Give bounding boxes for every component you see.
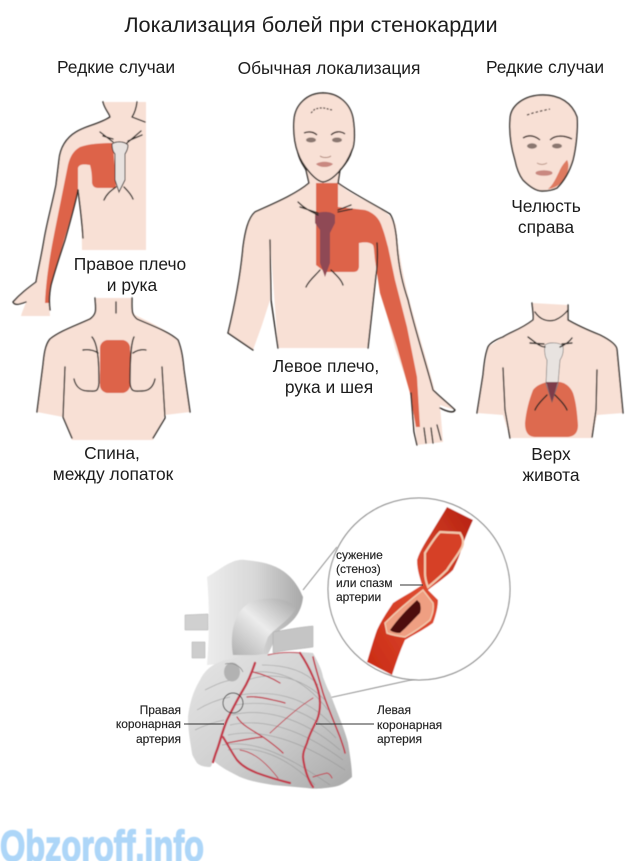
- figure: right shoulder and arm: [13, 102, 146, 316]
- label: left shoulder, arm and neck: [273, 356, 379, 397]
- label: back: Спина,: [84, 443, 140, 463]
- label: right shoulder and arm: и рука: [107, 275, 158, 295]
- sternum: [545, 343, 563, 402]
- label: back: между лопаток: [53, 464, 174, 484]
- label: upper abdomen: живота: [522, 465, 580, 485]
- label: left shoulder, arm and neck: Левое плечо,: [273, 356, 379, 376]
- label: right coronary artery: коронарная: [116, 717, 181, 731]
- label: upper abdomen: Верх: [531, 444, 571, 464]
- lower cut section: [385, 590, 433, 637]
- label: stenosis: сужение: [336, 548, 383, 562]
- label: right coronary artery: [116, 703, 224, 746]
- pain area: shoulder and arm: [45, 143, 116, 303]
- heading: usual localization: Обычная локализация: [238, 58, 420, 78]
- label: stenosis: (стеноз): [336, 562, 381, 576]
- label: left coronary artery: коронарная: [377, 718, 442, 732]
- label: stenosis: [336, 548, 423, 604]
- heart body: [188, 652, 352, 789]
- face: left figure: [304, 108, 345, 167]
- pain area: left shoulder, arm, neck: [316, 183, 420, 427]
- label: right coronary artery: Правая: [140, 703, 181, 717]
- label: upper abdomen: [522, 444, 580, 485]
- pain area: between shoulder blades: [100, 340, 130, 393]
- label: right jaw: справа: [518, 217, 574, 237]
- label: stenosis: или спазм: [336, 576, 393, 590]
- magnified circle: narrowed artery: [328, 498, 510, 680]
- label: right shoulder and arm: Правое плечо: [74, 254, 186, 274]
- face: right figure: [523, 109, 572, 176]
- pain area: upper abdomen: [525, 382, 578, 437]
- diagram: heart: [185, 547, 420, 789]
- label: left shoulder, arm and neck: рука и шея: [285, 377, 373, 397]
- coronary arteries: [213, 652, 345, 787]
- pointer lines to magnified circle: [240, 547, 420, 713]
- label: right jaw: [511, 196, 581, 237]
- label: left coronary artery: [316, 703, 442, 746]
- aorta and great vessels: [207, 560, 303, 665]
- upper cut section: [425, 532, 463, 587]
- pain area: jaw: [548, 160, 568, 189]
- label: right jaw: Челюсть: [511, 196, 581, 216]
- figure: upper abdomen: [477, 303, 623, 438]
- heading: rare cases left: Редкие случаи: [57, 57, 175, 77]
- sternum dark: [315, 212, 335, 277]
- label: right coronary artery: артерия: [136, 732, 181, 746]
- label: back: [53, 443, 174, 484]
- figure: left shoulder, arm and neck: [228, 93, 455, 445]
- heading: rare cases right: Редкие случаи: [486, 57, 604, 77]
- label: stenosis: артерии: [336, 590, 381, 604]
- label: left coronary artery: Левая: [377, 703, 411, 717]
- label: right shoulder and arm: [74, 254, 186, 295]
- label: left coronary artery: артерия: [377, 732, 422, 746]
- sternum: [112, 142, 128, 192]
- lumen: [390, 600, 421, 633]
- figure: right jaw: [510, 95, 577, 191]
- figure: back between shoulder blades: [37, 298, 190, 440]
- title: Локализация болей при стенокардии: [124, 12, 498, 37]
